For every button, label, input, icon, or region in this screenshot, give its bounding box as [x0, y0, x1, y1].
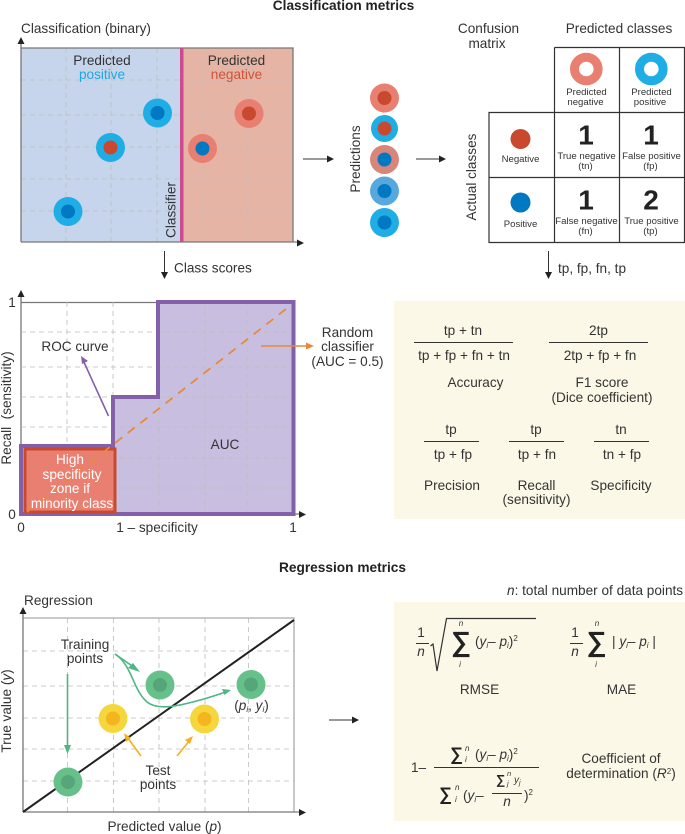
formula: R squared: i: [486, 754, 488, 763]
panel: ROC curve: zone if: [50, 481, 90, 496]
formula: RMSE: i: [486, 641, 488, 650]
confusion matrix: 2: [643, 184, 659, 216]
arrow: to regression formulas: [329, 716, 359, 724]
formula: MAE: ∑: [587, 626, 606, 658]
formula: R squared: (y: [475, 747, 486, 762]
panel: classification formulas: (Dice coefficient): [552, 390, 652, 405]
confusion matrix: positive: [634, 97, 666, 108]
formula: R squared: n: [455, 783, 460, 792]
confusion matrix: (fn): [578, 226, 593, 237]
panel: classification formulas: [394, 301, 685, 519]
formula: R squared: j: [506, 779, 509, 788]
formula: MAE: |: [649, 634, 656, 649]
formula: R squared: (y: [463, 788, 474, 803]
formula: R squared: ): [671, 766, 676, 781]
panel: binary classification plot: Predicted: [73, 53, 131, 68]
panel: ROC curve: AUC: [211, 437, 240, 452]
formula: MAE: n: [571, 644, 579, 659]
panel: ROC curve: 0: [17, 520, 25, 535]
formula: R squared: j: [518, 780, 521, 787]
confusion matrix: 1: [578, 184, 594, 216]
formula: R squared: 2: [667, 767, 672, 776]
panel: classification formulas: tp + fn: [518, 447, 556, 462]
confusion matrix: negative: [567, 97, 604, 108]
predictions column: Predictions: [348, 125, 363, 193]
panel: ROC curve: 1: [289, 520, 297, 535]
panel: ROC curve: 1 – specificity: [116, 520, 198, 535]
formula: RMSE: [416, 618, 536, 697]
panel: regression plot: (p: [234, 698, 246, 713]
formula: R squared: [411, 744, 676, 809]
formula: MAE: –: [628, 634, 639, 649]
confusion matrix: Positive: [504, 219, 537, 230]
formula: R squared: y: [514, 775, 519, 786]
confusion matrix: (tn): [578, 161, 593, 172]
confusion matrix: True negative: [557, 151, 616, 162]
formula: R squared: ∑: [496, 772, 505, 787]
formula: RMSE: i: [507, 641, 509, 650]
panel: classification formulas: tp: [530, 422, 542, 437]
formula: R squared: ): [509, 747, 513, 762]
panel: ROC curve: 1: [8, 295, 16, 310]
panel: classification formulas: 2tp: [589, 323, 608, 338]
panel: regression plot: Test: [146, 763, 171, 778]
panel: regression plot: ): [264, 698, 269, 713]
panel: classification formulas: F1 score: [576, 375, 628, 390]
formula: R squared: 1–: [411, 760, 427, 775]
formula: MAE: | y: [612, 634, 626, 649]
confusion matrix: 1: [578, 120, 594, 150]
formula: R squared: i: [455, 795, 457, 804]
arrow: to predictions: [303, 156, 334, 162]
formula: RMSE: i: [459, 660, 461, 669]
formula: R squared: ∑: [439, 784, 452, 804]
arrow: counts: [545, 251, 626, 279]
panel: regression formulas: [394, 602, 685, 821]
confusion matrix: matrix: [468, 36, 506, 51]
formula: R squared: 2: [513, 747, 518, 756]
panel: ROC curve: ROC curve: [41, 339, 109, 354]
panel: regression plot: Regression: [24, 593, 93, 608]
formula: MAE: i: [626, 641, 628, 650]
confusion matrix: Predicted classes: [566, 21, 672, 36]
formula: R squared: determination (R: [566, 766, 667, 781]
panel: regression plot: points: [67, 651, 103, 666]
confusion matrix: True positive: [624, 216, 679, 227]
formula: R squared: n: [503, 794, 511, 809]
formula: R squared: Coefficient of: [581, 751, 661, 766]
confusion matrix: Confusion: [458, 21, 519, 36]
panel: classification formulas: tn + fp: [603, 447, 641, 462]
panel: ROC curve: High: [56, 452, 84, 467]
formula: MAE: n: [595, 619, 600, 628]
panel: ROC curve: minority class: [31, 496, 113, 511]
formula: RMSE: –: [488, 634, 499, 649]
formula: RMSE: RMSE: [460, 682, 499, 697]
formula: R squared: ): [524, 788, 529, 803]
confusion matrix: [458, 21, 684, 242]
panel: ROC curve: [0, 290, 384, 535]
confusion matrix: Negative: [502, 154, 539, 165]
formula: R squared: 2: [529, 788, 534, 797]
heading: regression metrics: Regression metrics: [279, 560, 406, 575]
formula: R squared: ∑: [450, 744, 463, 764]
arrow: class scores: [161, 251, 252, 279]
confusion matrix: (fp): [643, 161, 658, 172]
panel: binary classification plot: [18, 21, 304, 246]
confusion matrix: Actual classes: [464, 133, 479, 220]
panel: classification formulas: tp: [445, 422, 457, 437]
formula: R squared: i: [474, 795, 476, 804]
confusion matrix: 1: [643, 120, 659, 150]
formula: RMSE: n: [459, 619, 464, 628]
formula: RMSE: 1: [417, 625, 425, 640]
formula: RMSE: ): [509, 634, 513, 649]
panel: classification formulas: Recall: [518, 478, 555, 493]
panel: regression plot: Predicted value (p): [107, 819, 222, 834]
formula: MAE: [570, 619, 656, 697]
panel: regression plot: y: [255, 698, 264, 714]
panel: binary classification plot: positive: [79, 67, 125, 82]
predictions column: [348, 84, 399, 237]
panel: classification formulas: tp + tn: [444, 323, 482, 338]
formula: RMSE: 2: [513, 634, 518, 643]
panel: ROC curve: Random: [322, 325, 373, 340]
formula: RMSE: (y: [475, 634, 486, 649]
confusion matrix: (tp): [643, 226, 658, 237]
panel: classification formulas: tn: [615, 422, 627, 437]
panel: classification formulas: Specificity: [590, 478, 652, 493]
panel: regression plot: i: [246, 705, 248, 714]
formula: R squared: i: [507, 754, 509, 763]
formula: R squared: n: [507, 769, 511, 778]
formula: MAE: p: [638, 634, 649, 650]
panel: regression plot: [0, 593, 306, 834]
confusion matrix: False positive: [622, 151, 681, 162]
panel: classification formulas: tp + fp: [434, 447, 472, 462]
panel: binary classification plot: Classification (binary): [21, 21, 151, 36]
panel: ROC curve: 0: [8, 507, 16, 522]
arrow: counts: tp, fp, fn, tp: [558, 261, 626, 276]
panel: binary classification plot: negative: [211, 67, 262, 82]
confusion matrix: Predicted: [566, 87, 607, 98]
formula: R squared: –: [488, 747, 499, 762]
panel: classification formulas: 2tp + fp + fn: [564, 348, 636, 363]
panel: binary classification plot: Classifier: [164, 182, 178, 238]
panel: regression plot: ,: [248, 698, 256, 713]
formula: MAE: 1: [571, 625, 579, 640]
formula: R squared: p: [498, 747, 509, 763]
confusion matrix: Predicted: [631, 87, 672, 98]
panel: classification formulas: (sensitivity): [503, 492, 570, 507]
panel: regression plot: i: [262, 705, 264, 714]
panel: classification formulas: tp + fp + fn + tn: [418, 348, 510, 363]
formula: MAE: i: [647, 641, 649, 650]
formula: R squared: –: [476, 788, 484, 803]
formula: MAE: MAE: [607, 682, 636, 697]
formula: RMSE: p: [498, 634, 509, 650]
panel: regression plot: points: [140, 777, 176, 792]
formula: MAE: i: [595, 660, 597, 669]
formula: R squared: i: [465, 755, 467, 764]
panel: ROC curve: specificity: [43, 467, 102, 482]
panel: regression plot: Training: [61, 637, 109, 652]
panel: classification formulas: Accuracy: [448, 375, 504, 390]
panel: ROC curve: (AUC = 0.5): [311, 354, 384, 369]
confusion matrix: False negative: [555, 216, 618, 227]
panel: binary classification plot: Predicted: [208, 53, 265, 68]
panel: classification formulas: Precision: [424, 478, 480, 493]
panel: ROC curve: classifier: [321, 339, 374, 354]
formula: RMSE: ∑: [451, 626, 471, 658]
arrow: to confusion matrix: [416, 156, 446, 162]
note: n definition: n: total number of data points: [507, 583, 683, 598]
formula: RMSE: n: [417, 644, 425, 659]
arrow: class scores: Class scores: [174, 260, 252, 276]
formula: R squared: n: [465, 744, 470, 753]
